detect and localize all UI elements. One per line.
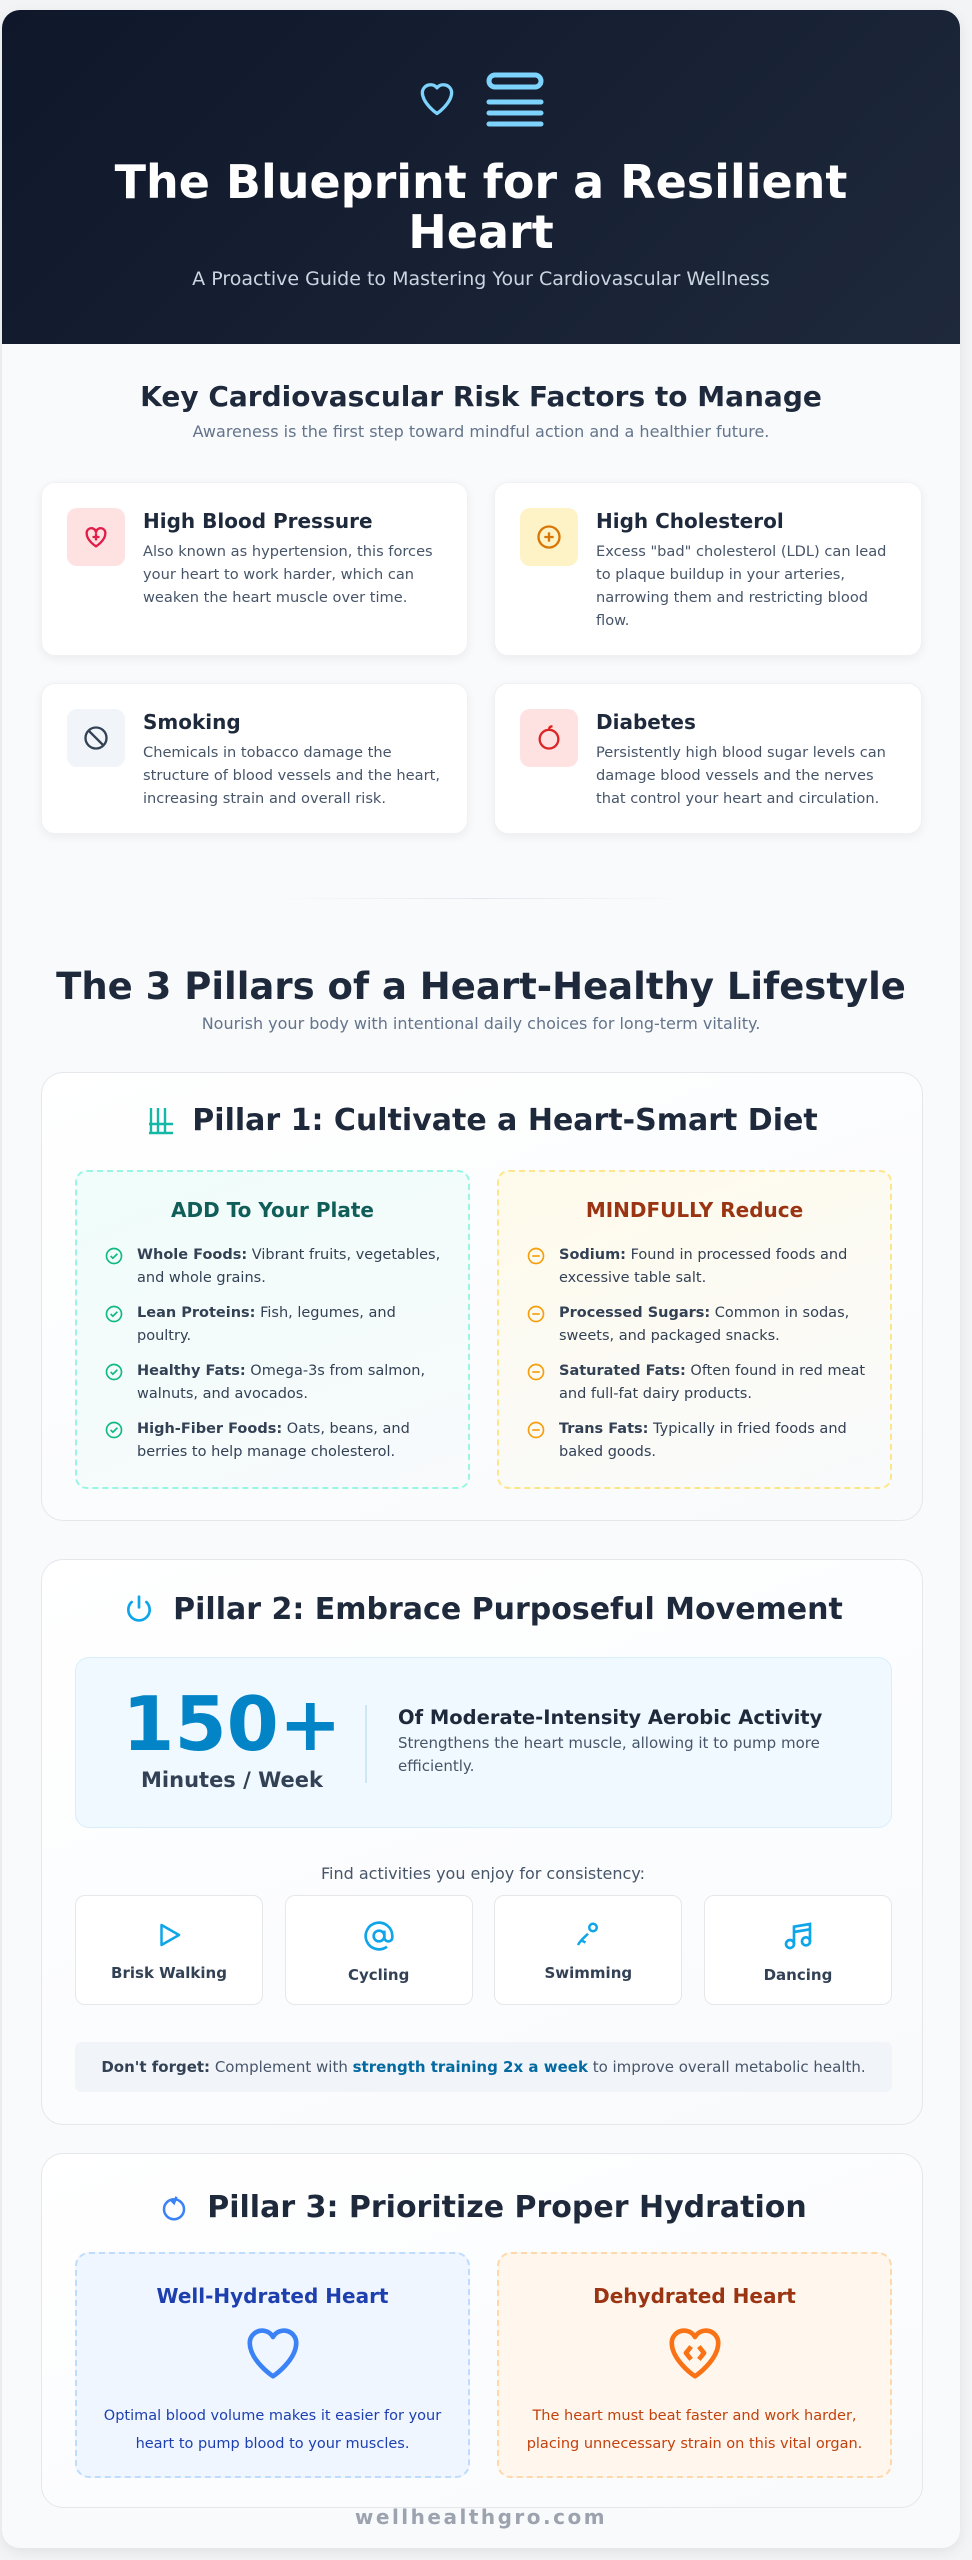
item: poultry. <box>137 1328 191 1344</box>
panel: dehydrated: placing unnecessary strain on this vital organ. <box>527 2436 862 2452</box>
icon: power <box>127 1595 151 1622</box>
icon: heart <box>420 83 454 116</box>
panel: well-hydrated: Optimal blood volume makes it easier for your <box>104 2408 441 2424</box>
panel: dehydrated <box>497 2252 892 2478</box>
item: High-Fiber Foods: Oats, beans, and berries to help manage cholesterol. <box>137 1421 410 1460</box>
activity: walking: Brisk Walking <box>111 1964 227 1982</box>
stat description: Strengthens the heart muscle, allowing it to pump more efficiently. <box>398 1734 820 1775</box>
panel: well-hydrated: heart to pump blood to your muscles. <box>136 2436 409 2452</box>
panel: well-hydrated: Well-Hydrated Heart <box>156 2284 388 2308</box>
title: Heart <box>408 205 554 259</box>
item: Whole Foods: Vibrant fruits, vegetables, and whole grains. <box>137 1247 440 1286</box>
panel: pillar 3 <box>41 2153 923 2508</box>
card: high blood pressure <box>41 482 468 656</box>
panel: well-hydrated <box>75 2252 470 2478</box>
icon: plus circle <box>520 508 578 566</box>
activity: dancing: Dancing <box>764 1966 832 1984</box>
activity: cycling: Cycling <box>348 1966 409 1984</box>
panel: mindfully reduce <box>497 1170 892 1489</box>
activity: walking <box>75 1895 263 2005</box>
section subtitle: Awareness is the first step toward mindful action and a healthier future. <box>193 422 769 441</box>
panel: add to plate: ADD To Your Plate <box>171 1198 374 1222</box>
panel: mindfully reduce: MINDFULLY Reduce <box>586 1198 803 1222</box>
panel: pillar 2 <box>41 1559 923 2125</box>
item <box>106 1305 396 1344</box>
icon: heart orange <box>669 2328 721 2379</box>
activity: dancing <box>704 1895 892 2005</box>
stat number: 150+ <box>122 1680 342 1768</box>
pillar 1 heading: Pillar 1: Cultivate a Heart-Smart Diet <box>192 1103 818 1138</box>
footer: wellhealthgro.com <box>355 2505 607 2529</box>
icon: no smoking <box>67 709 125 767</box>
card: diabetes: Diabetes <box>596 710 696 734</box>
item: Saturated Fats: Often found in red meat and full-fat dairy products. <box>559 1363 865 1402</box>
card: high cholesterol <box>494 482 922 656</box>
stat label: Minutes / Week <box>141 1768 323 1792</box>
card: diabetes: Persistently high blood sugar levels can damage blood vessels and the nerves that control your heart and circulation. <box>596 744 886 807</box>
callout: strength training: Don't forget: Complement with strength training 2x a week to improve overall metabolic health. <box>101 2058 866 2076</box>
pillar 3 heading: Pillar 3: Prioritize Proper Hydration <box>207 2190 807 2225</box>
activity cards <box>75 1895 892 2005</box>
activity: swimming: Swimming <box>544 1964 632 1982</box>
subtitle: A Proactive Guide to Mastering Your Cardiovascular Wellness <box>192 268 770 290</box>
stat description <box>398 1706 822 1775</box>
header <box>2 10 960 344</box>
card: high cholesterol: High Cholesterol <box>596 509 784 533</box>
icon: apple <box>520 709 578 767</box>
card: high blood pressure: Also known as hypertension, this forces your heart to work harder, which can weaken the heart muscle over time. <box>143 543 433 606</box>
pillar 2 heading: Pillar 2: Embrace Purposeful Movement <box>173 1592 843 1627</box>
item: Lean Proteins: Fish, legumes, and <box>137 1305 396 1321</box>
section subtitle: Nourish your body with intentional daily choices for long-term vitality. <box>202 1014 760 1033</box>
stat description: Of Moderate-Intensity Aerobic Activity <box>398 1706 822 1729</box>
activities intro: Find activities you enjoy for consistency: <box>321 1864 645 1883</box>
card: high cholesterol: Excess "bad" cholesterol (LDL) can lead to plaque buildup in your arteries, narrowing them and restricting blood flow. <box>596 543 886 629</box>
activity: swimming <box>494 1895 682 2005</box>
card: diabetes <box>494 683 922 834</box>
panel: add to plate <box>75 1170 470 1489</box>
panel: dehydrated: Dehydrated Heart <box>593 2284 796 2308</box>
icon: heart pulse <box>67 508 125 566</box>
card: smoking <box>41 683 468 834</box>
card: smoking: Chemicals in tobacco damage the structure of blood vessels and the heart, increasing strain and overall risk. <box>143 744 440 807</box>
item: Healthy Fats: Omega-3s from salmon, walnuts, and avocados. <box>137 1363 425 1402</box>
item: Sodium: Found in processed foods and excessive table salt. <box>559 1247 847 1286</box>
section heading: risk factors: Key Cardiovascular Risk Factors to Manage <box>140 380 822 413</box>
item: Processed Sugars: Common in sodas, sweets, and packaged snacks. <box>559 1305 849 1344</box>
icon: utensils <box>149 1108 173 1134</box>
card: smoking: Smoking <box>143 710 241 734</box>
panel: dehydrated: The heart must beat faster and work harder, <box>532 2408 857 2424</box>
activity: cycling <box>285 1895 473 2005</box>
stat box <box>75 1657 892 1828</box>
icon: drop <box>162 2196 186 2220</box>
title: The Blueprint for a Resilient <box>115 155 847 209</box>
icon: heart blue <box>247 2328 299 2379</box>
section heading: pillars: The 3 Pillars of a Heart-Healthy Lifestyle <box>56 965 906 1008</box>
card: high blood pressure: High Blood Pressure <box>143 509 373 533</box>
item: Trans Fats: Typically in fried foods and baked goods. <box>559 1421 847 1460</box>
callout: strength training <box>75 2042 892 2092</box>
icon: list <box>486 72 544 126</box>
panel: pillar 1 <box>41 1072 923 1521</box>
title <box>114 155 847 259</box>
